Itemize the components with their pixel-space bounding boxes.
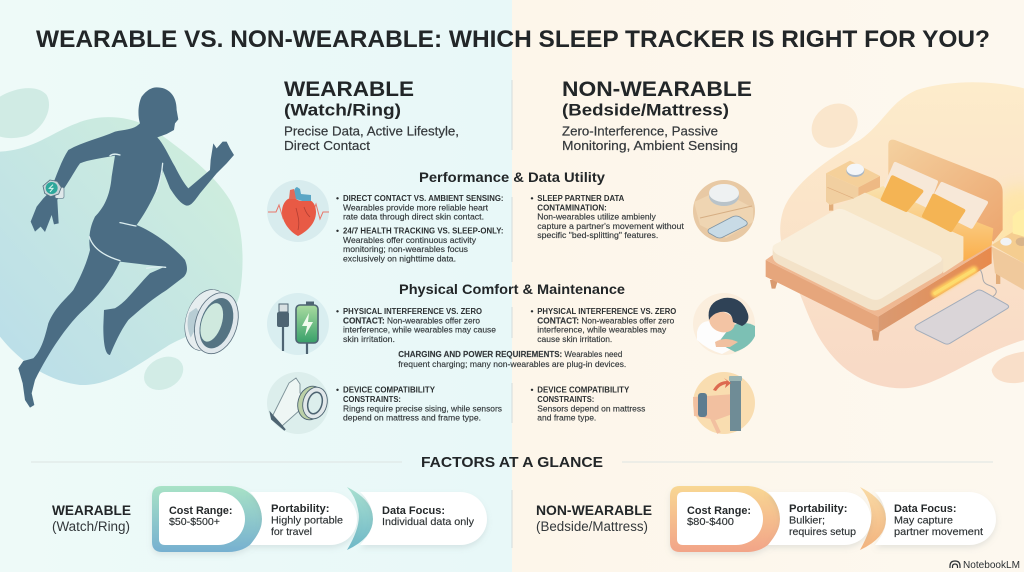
text: compatibility, wearable: Rings require precise sising, while sensors — [343, 403, 502, 413]
background: left half — [0, 0, 512, 572]
pill: portability — [768, 492, 871, 545]
text: comfort, non-wearable: • — [530, 306, 534, 316]
label: wearable — [52, 502, 131, 534]
pill: portability: for travel — [271, 527, 312, 538]
pill: cost range: $50-$500+ — [169, 517, 220, 528]
text: performance, wearable: DIRECT CONTACT VS. AMBIENT SENSING: — [343, 193, 504, 203]
text: comfort, wearable — [336, 306, 496, 344]
logo: NotebookLM: NotebookLM — [963, 560, 1020, 571]
mattress head end — [865, 186, 993, 262]
text: performance, wearable: • — [336, 226, 339, 236]
title: WEARABLE VS. NON-WEARABLE: WHICH SLEEP TRACKER IS RIGHT FOR YOU? — [36, 26, 990, 53]
pill: cost range — [152, 486, 262, 552]
text: performance, wearable: Wearables provide more reliable heart — [343, 202, 489, 212]
pill: data focus: Data Focus: — [894, 503, 956, 515]
pill: data focus — [875, 492, 996, 545]
text: comfort, non-wearable: cause skin irritation. — [537, 334, 612, 344]
right nightstand — [992, 209, 1024, 290]
icon: wrist watch and band — [693, 372, 755, 434]
pill: cost range: $80-$400 — [687, 517, 734, 528]
column heading: non-wearable: Monitoring, Ambient Sensing — [562, 139, 738, 153]
label: wearable: (Watch/Ring) — [52, 519, 130, 534]
text: compatibility, non-wearable — [530, 384, 645, 423]
icon: smart ring — [178, 284, 246, 359]
crescent connector — [347, 487, 373, 550]
pill: data focus: partner movement — [894, 527, 983, 538]
column heading: non-wearable: (Bedside/Mattress) — [562, 102, 729, 120]
icon: hand and ring — [267, 372, 331, 434]
label: wearable: WEARABLE — [52, 502, 131, 518]
heading: physical comfort and maintenance: Physical Comfort & Maintenance — [399, 281, 625, 297]
text: performance, non-wearable: SLEEP PARTNER DATA — [537, 193, 624, 203]
text: comfort, non-wearable: PHYSICAL INTERFERENCE VS. ZERO — [537, 306, 677, 316]
factors row: wearable — [52, 486, 487, 552]
text: performance, non-wearable: • — [530, 193, 534, 203]
pill: data focus: Individual data only — [382, 517, 475, 528]
column heading: wearable: WEARABLE — [284, 78, 414, 101]
bed frame legs — [770, 280, 880, 341]
column heading: wearable — [284, 78, 459, 153]
blob backdrop — [780, 82, 1024, 388]
text: compatibility, non-wearable: DEVICE COMPATIBILITY — [537, 384, 630, 394]
left nightstand — [826, 161, 880, 211]
pill: cost range: Cost Range: — [687, 505, 751, 517]
text: charging and power requirements — [398, 349, 626, 369]
text: performance, non-wearable: specific "bed-splitting" features. — [537, 230, 658, 240]
icon: charger and battery — [267, 293, 329, 355]
pill: cost range: Cost Range: — [169, 505, 232, 517]
icon: bedside device and mat — [693, 180, 755, 242]
column heading: non-wearable — [562, 78, 752, 153]
text: performance, non-wearable — [530, 193, 684, 240]
blob small bottom — [138, 350, 189, 397]
illustration: runner with watch and ring — [0, 87, 246, 408]
blob small top — [0, 88, 49, 138]
text: compatibility, non-wearable: CONSTRAINTS: — [537, 394, 594, 404]
pill: data focus: May capture — [894, 516, 953, 526]
icon: sleeping person — [693, 293, 755, 355]
icon: heart — [267, 180, 329, 242]
pill: cost range — [670, 486, 780, 552]
text: compatibility, non-wearable: Sensors depend on mattress — [537, 403, 645, 413]
text: compatibility, wearable: depend on mattress and frame type. — [343, 413, 481, 423]
text: compatibility, wearable — [336, 384, 502, 423]
text: performance, wearable: 24/7 HEALTH TRACKING VS. SLEEP-ONLY: — [343, 226, 504, 236]
heading: factors at a glance: FACTORS AT A GLANCE — [421, 454, 603, 471]
blob backdrop — [0, 117, 243, 385]
white pillows — [886, 164, 986, 227]
background: right half — [512, 0, 1024, 572]
pill: data focus — [360, 492, 487, 545]
crescent connector — [860, 487, 886, 550]
label: non-wearable: NON-WEARABLE — [536, 502, 652, 518]
text: comfort, wearable: skin irritation. — [343, 334, 395, 344]
text: performance, non-wearable: capture a partner's movement without — [537, 221, 684, 231]
duvet side — [773, 248, 943, 310]
under-mattress sensor pad — [915, 290, 1009, 344]
text: performance, non-wearable: CONTAMINATION: — [537, 202, 607, 212]
text: comfort, wearable: CONTACT: Non-wearables offer zero — [343, 315, 480, 325]
factors row: non-wearable — [536, 486, 996, 552]
pill: portability: requires setup — [789, 527, 856, 538]
blob small top — [803, 94, 867, 157]
text: performance, wearable: • — [336, 193, 339, 203]
text: performance, non-wearable: Non-wearables utilize ambienly — [537, 212, 656, 222]
column heading: non-wearable: NON-WEARABLE — [562, 78, 752, 101]
text: performance, wearable: rate data through direct skin contact. — [343, 212, 484, 222]
column heading: wearable: Direct Contact — [284, 139, 371, 153]
illustration: bed with sensors — [766, 82, 1024, 388]
text: compatibility, non-wearable: and frame type. — [537, 413, 596, 423]
pill: portability: Highly portable — [271, 516, 343, 526]
blob small bottom — [992, 352, 1024, 383]
label: non-wearable: (Bedside/Mattress) — [536, 519, 648, 534]
text: charging and power requirements: CHARGING AND POWER REQUIREMENTS: Wearables need — [398, 349, 622, 359]
under-mattress glow strip — [935, 270, 974, 293]
column heading: wearable: (Watch/Ring) — [284, 102, 401, 120]
label: non-wearable — [536, 502, 652, 534]
runner highlight lines — [89, 154, 166, 268]
text: comfort, non-wearable: interference, while wearables may — [537, 325, 667, 335]
text: comfort, wearable: PHYSICAL INTERFERENCE VS. ZERO — [343, 306, 482, 316]
heading: performance and data utility: Performance & Data Utility — [419, 169, 605, 185]
headboard — [888, 140, 1003, 242]
pill: portability — [250, 492, 357, 545]
bed frame — [766, 242, 992, 333]
sensor cable — [980, 269, 996, 297]
text: compatibility, wearable: DEVICE COMPATIBILITY — [343, 384, 435, 394]
text: comfort, wearable: • — [336, 306, 339, 316]
column heading: wearable: Precise Data, Active Lifestyle, — [284, 124, 459, 138]
text: compatibility, wearable: CONSTRAINTS: — [343, 394, 401, 404]
text: performance, wearable: Wearables offer continuous activity — [343, 235, 477, 245]
icon: watch on wrist — [43, 180, 64, 198]
lamp ambient glow — [990, 187, 1024, 253]
column heading: non-wearable: Zero-Interference, Passive — [562, 124, 718, 138]
text: performance, wearable — [336, 193, 504, 263]
text: compatibility, non-wearable: • — [530, 384, 534, 394]
orange cushions — [883, 177, 963, 230]
text: performance, wearable: monitoring; non-wearables focus — [343, 244, 468, 254]
duvet top — [773, 209, 942, 300]
pill: portability: Portability: — [271, 503, 330, 515]
pill: data focus: Data Focus: — [382, 505, 445, 517]
pill: portability: Portability: — [789, 503, 848, 515]
text: comfort, non-wearable — [530, 306, 677, 344]
text: comfort, non-wearable: CONTACT: Non-wearables offer zero — [537, 315, 674, 325]
text: comfort, wearable: interference, while wearables may cause — [343, 325, 496, 335]
text: performance, wearable: exclusively on nighttime data. — [343, 253, 456, 263]
pill: portability: Bulkier; — [789, 516, 825, 526]
text: compatibility, wearable: • — [336, 384, 339, 394]
runner silhouette — [18, 87, 234, 408]
sheet fold — [836, 193, 963, 273]
text: charging and power requirements: frequent charging; many non-wearables are plug-in devices. — [398, 359, 626, 369]
